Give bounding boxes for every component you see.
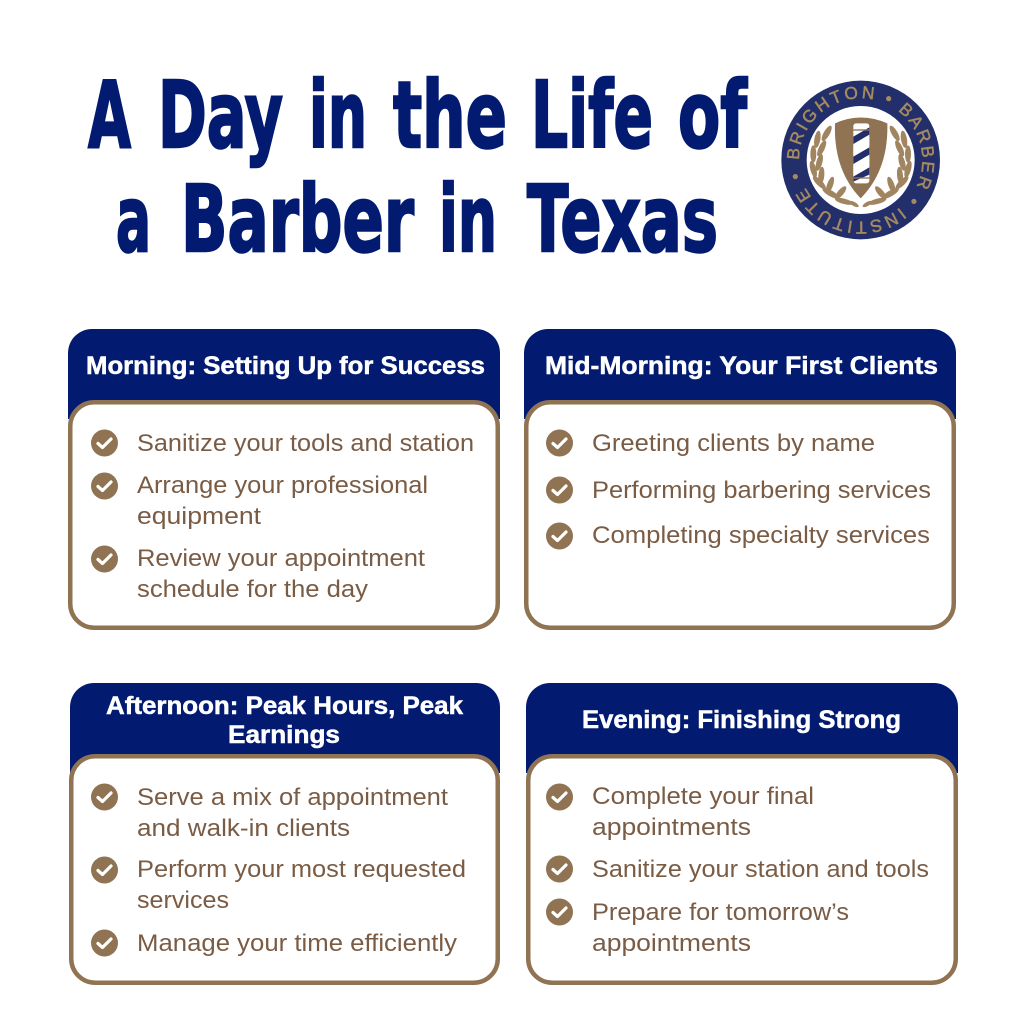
- evening item: complete: Complete your final: [592, 783, 814, 810]
- evening item: prepare: appointments: [592, 930, 751, 957]
- morning item: arrange: equipment: [137, 503, 261, 530]
- logo ring text: BRIGHTON • BARBER • INSTITUTE •: [786, 86, 935, 234]
- afternoon heading: [106, 692, 463, 749]
- morning item: sanitize: Sanitize your tools and station: [137, 430, 474, 457]
- mid-morning item: specialty: Completing specialty services: [592, 522, 930, 549]
- title: of: [678, 62, 748, 169]
- panel: morning: [68, 329, 500, 628]
- morning item: arrange: Arrange your professional: [137, 472, 428, 499]
- mid-morning heading: Mid-Morning: Your First Clients: [545, 352, 938, 380]
- morning header band: [68, 329, 500, 419]
- morning body box: [70, 402, 498, 628]
- afternoon item: perform: Perform your most requested: [137, 856, 466, 883]
- morning heading: Morning: Setting Up for Success: [86, 352, 485, 380]
- title: a: [116, 166, 151, 273]
- title: [88, 62, 748, 273]
- mid-morning item: barbering: Performing barbering services: [592, 477, 931, 504]
- morning item: arrange: [91, 472, 428, 530]
- evening heading: Evening: Finishing Strong: [582, 706, 901, 734]
- morning item: review: Review your appointment: [137, 545, 425, 572]
- afternoon item: perform: [91, 856, 466, 914]
- afternoon heading: Earnings: [228, 721, 340, 749]
- evening item: complete: [546, 783, 814, 841]
- afternoon item: perform: services: [137, 887, 229, 914]
- afternoon item: serve: [91, 784, 448, 842]
- mid-morning header band: [524, 329, 956, 419]
- title: in: [309, 62, 367, 169]
- panel: mid-morning: [524, 329, 956, 628]
- mid-morning item: greeting: Greeting clients by name: [592, 430, 875, 457]
- title: Day: [158, 62, 283, 169]
- title: in: [439, 166, 497, 273]
- logo: Brighton Barber Institute badge: [781, 80, 940, 240]
- evening body box: [528, 756, 956, 983]
- panel: evening: [526, 683, 958, 983]
- title: Barber: [181, 166, 414, 273]
- title: Texas: [527, 166, 718, 273]
- afternoon heading: Afternoon: Peak Hours, Peak: [106, 692, 463, 720]
- evening item: prepare: Prepare for tomorrow’s: [592, 899, 849, 926]
- evening item: sanitize: Sanitize your station and tools: [592, 856, 929, 883]
- logo shield: [835, 117, 887, 198]
- afternoon body box: [71, 756, 498, 983]
- afternoon item: manage: Manage your time efficiently: [137, 930, 457, 957]
- title: Life: [531, 62, 653, 169]
- afternoon item: serve: Serve a mix of appointment: [137, 784, 448, 811]
- logo right laurel: [862, 124, 913, 208]
- title: the: [393, 62, 507, 169]
- mid-morning body box: [526, 402, 954, 628]
- afternoon item: serve: and walk-in clients: [137, 815, 350, 842]
- morning item: review: [91, 545, 425, 603]
- evening item: complete: appointments: [592, 814, 751, 841]
- panel: afternoon: [70, 683, 500, 983]
- logo barber pole: [853, 123, 869, 183]
- morning item: review: schedule for the day: [137, 576, 368, 603]
- evening item: prepare: [546, 898, 849, 957]
- logo left laurel: [808, 124, 860, 208]
- title: A: [88, 62, 131, 169]
- evening header band: [526, 683, 958, 773]
- afternoon header band: [70, 683, 500, 773]
